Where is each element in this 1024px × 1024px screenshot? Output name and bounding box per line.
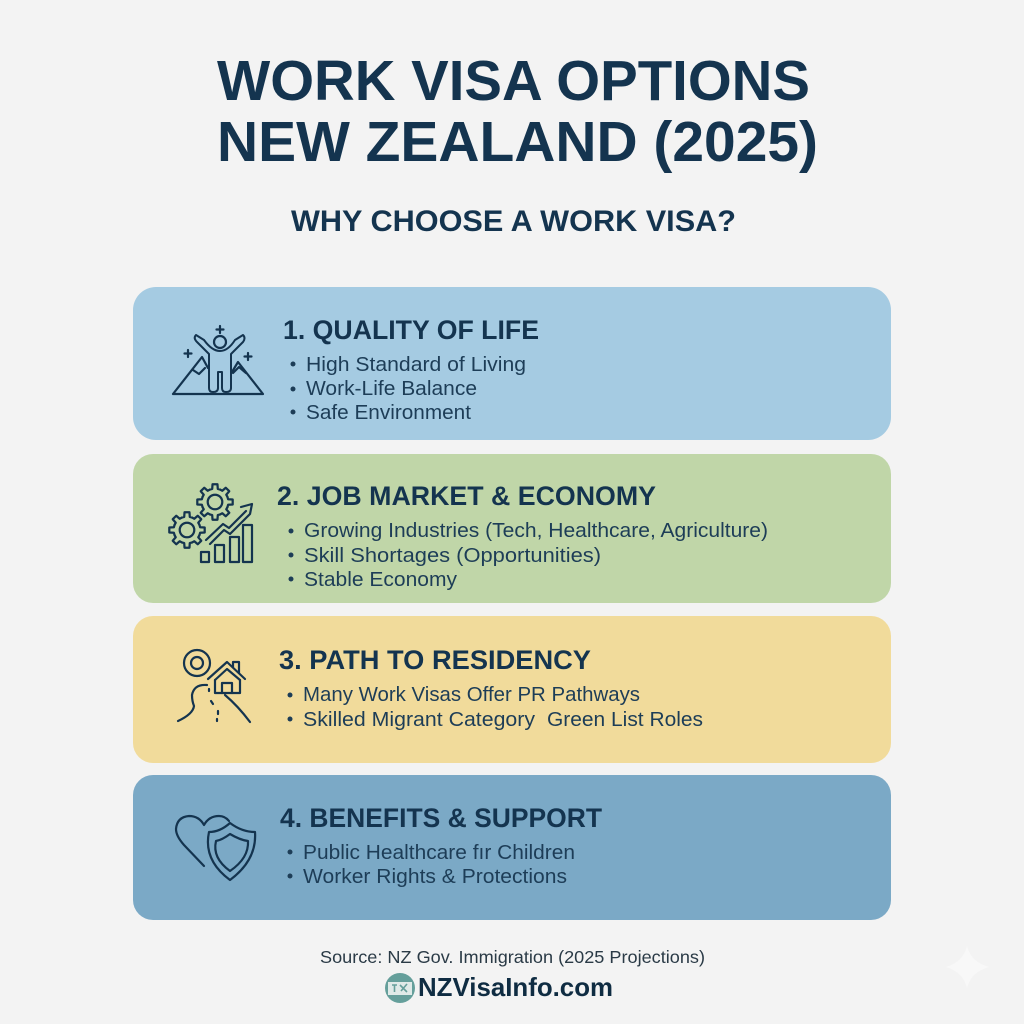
title: WORK VISA OPTIONS	[217, 49, 810, 113]
panel: path to residency	[133, 616, 891, 763]
icon: heart and shield	[176, 816, 255, 880]
bullet list: path to residency: Skilled Migrant Category	[303, 709, 535, 731]
brand name: NZVisaInfo.com	[418, 972, 613, 1002]
bullet list: benefits and support: Public Healthcare fır Children	[303, 842, 575, 864]
panel: quality of life	[133, 287, 891, 440]
bullet list: benefits and support	[288, 842, 575, 888]
heading: path to residency: 3. PATH TO RESIDENCY	[279, 645, 591, 675]
bullet list: path to residency: Many Work Visas Offer PR Pathways	[303, 684, 640, 706]
bullet list: job market	[288, 520, 768, 591]
bullet list: quality of life: Work-Life Balance	[306, 378, 477, 400]
heading: job market: 2. JOB MARKET & ECONOMY	[277, 481, 656, 511]
bullet list: quality of life: High Standard of Living	[306, 354, 526, 376]
heading: benefits and support: 4. BENEFITS & SUPPORT	[280, 803, 602, 833]
icon: person on mountains	[173, 326, 263, 394]
icon: house on winding path	[178, 650, 250, 722]
bullet list: job market: Skill Shortages (Opportunities)	[304, 545, 601, 567]
title: NEW ZEALAND (2025)	[217, 110, 818, 174]
bullet list: quality of life: Safe Environment	[306, 402, 471, 424]
bullet list: job market: Stable Economy	[304, 569, 457, 591]
source note: Source: NZ Gov. Immigration (2025 Projections)	[320, 947, 705, 967]
title	[217, 49, 818, 174]
icon: gears and growth chart	[169, 484, 252, 562]
heading: quality of life: 1. QUALITY OF LIFE	[283, 315, 539, 345]
icon: sparkle watermark	[946, 946, 989, 988]
bullet list: job market: Growing Industries (Tech, Healthcare, Agriculture)	[304, 520, 768, 542]
bullet list: quality of life	[290, 354, 526, 424]
bullet list: benefits and support: Worker Rights & Protections	[303, 866, 567, 888]
panel: job market and economy	[133, 454, 891, 603]
subtitle: WHY CHOOSE A WORK VISA?	[291, 205, 736, 238]
brand logo and name	[385, 972, 613, 1003]
bullet list: path to residency	[288, 684, 703, 731]
panel: benefits and support	[133, 775, 891, 920]
bullet list: path to residency: Green List Roles	[547, 709, 703, 731]
icon: logo badge	[385, 973, 415, 1003]
